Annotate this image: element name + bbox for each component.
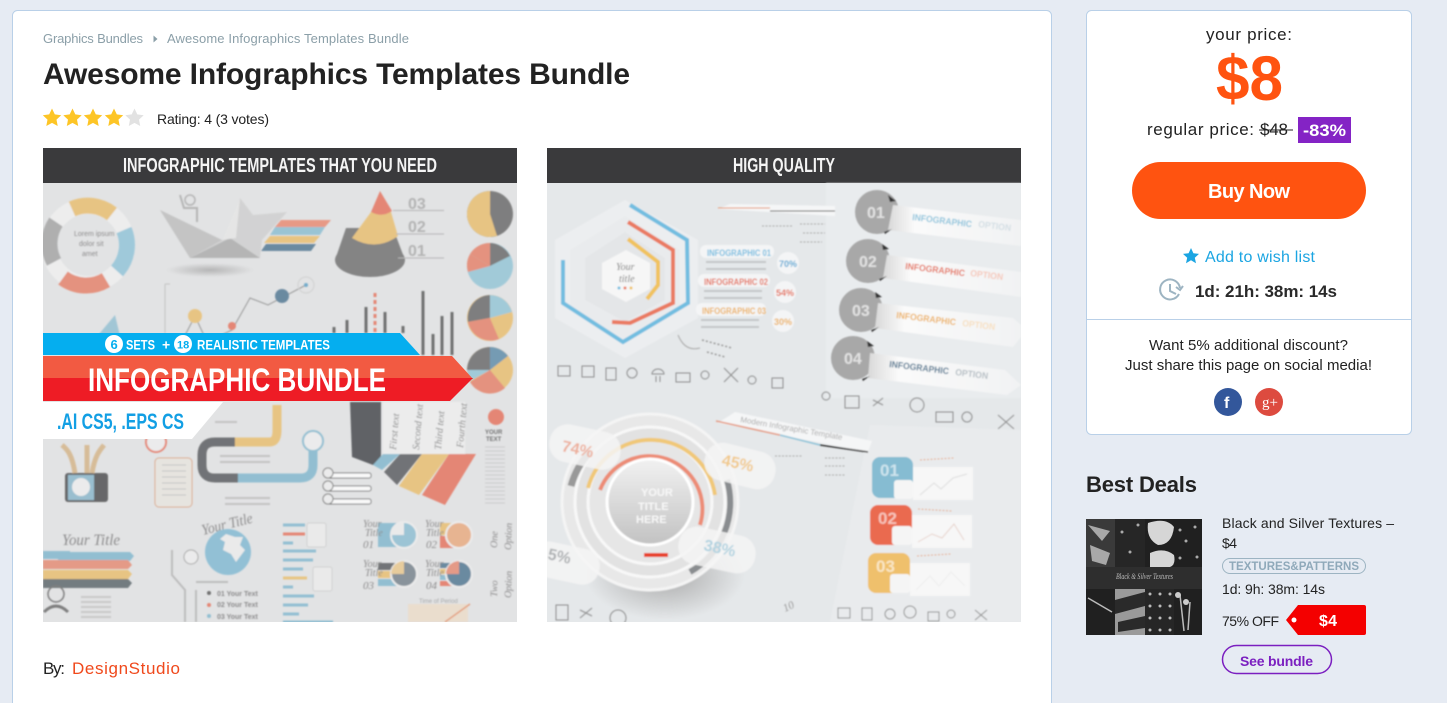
artwork: hexagon chart: INFOGRAPHIC 01 — [707, 248, 771, 258]
price value: $8 — [1216, 44, 1283, 114]
image header — [43, 148, 517, 183]
artwork: numbered ribbons: INFOGRAPHIC — [889, 359, 950, 376]
artwork: lower templates: Your Title — [62, 532, 120, 549]
artwork: lower templates: 03 — [363, 580, 374, 592]
regular price: $48 — [1260, 120, 1288, 139]
image header — [547, 148, 1021, 183]
artwork: lower templates: Option — [503, 571, 515, 598]
artwork: hexagon chart: 54% — [776, 288, 794, 298]
artwork: upper templates: dolor sit — [79, 241, 104, 248]
artwork: round chart and step cards: 74% — [560, 438, 595, 462]
artwork: round chart and step cards: 02 — [878, 509, 897, 528]
artwork: round chart and step cards: 45% — [720, 452, 755, 476]
deal thumbnail: Black & Silver Textures — [1116, 571, 1173, 581]
artwork: lower templates: Title — [365, 528, 383, 539]
artwork: lower templates — [43, 402, 515, 622]
artwork: lower templates: Second text — [411, 403, 426, 450]
artwork: lower templates: 02 Your Text — [217, 602, 259, 609]
artwork: numbered ribbons: INFOGRAPHIC — [905, 261, 966, 278]
artwork: round chart and step cards: 03 — [876, 557, 895, 576]
discount text: 75% OFF — [1222, 613, 1279, 629]
artwork: numbered ribbons: OPTION — [978, 219, 1012, 233]
artwork: numbered ribbons: 01 — [867, 205, 885, 222]
blue banner: 6 — [110, 337, 118, 352]
artwork: lower templates: One — [489, 531, 501, 548]
icon: google plus — [1255, 388, 1283, 416]
title: Awesome Infographics Templates Bundle — [43, 58, 630, 91]
artwork: lower templates: Option — [503, 523, 515, 550]
artwork: lower templates: Title — [365, 568, 383, 579]
artwork: hexagon chart: INFOGRAPHIC 02 — [704, 277, 768, 287]
artwork: upper templates: amet — [82, 251, 98, 258]
artwork: numbered ribbons: 03 — [852, 303, 870, 320]
artwork: lower templates: Your — [363, 519, 382, 530]
panel: main product — [12, 10, 1052, 703]
share prompt: Just share this page on social media! — [1125, 357, 1372, 374]
artwork: lower templates: 01 — [363, 539, 374, 551]
deal countdown: 1d: 9h: 38m: 14s — [1222, 581, 1325, 597]
artwork: upper templates: 02 — [408, 219, 426, 236]
deal title: $4 — [1222, 535, 1237, 551]
artwork: round chart and step cards: HERE — [636, 514, 667, 526]
artwork: round chart and step cards: 5% — [546, 546, 572, 568]
artwork: round chart and step cards: 38% — [702, 537, 737, 561]
artwork: lower templates: 01 Your Text — [217, 591, 259, 598]
artwork: round chart and step cards — [527, 392, 1021, 626]
artwork: lower templates: TEXT — [486, 437, 502, 443]
artwork: numbered ribbons: INFOGRAPHIC — [896, 310, 957, 327]
your price label: your price: — [1206, 25, 1292, 44]
artwork: lower templates: YOUR — [485, 430, 503, 436]
icon: google plus: g+ — [1262, 395, 1278, 411]
buy now button — [1132, 162, 1366, 219]
artwork: upper templates — [49, 191, 513, 394]
share prompt: Want 5% additional discount? — [1149, 337, 1348, 354]
discount badge: -83% — [1303, 121, 1346, 140]
artwork: round chart and step cards: 01 — [880, 461, 899, 480]
artwork: lower templates: Your Title — [200, 511, 255, 539]
artwork: lower templates: Your — [363, 559, 382, 570]
artwork: lower templates: Title — [426, 568, 444, 579]
blue banner — [43, 333, 420, 355]
author line: By: — [43, 659, 65, 678]
artwork: numbered ribbons: OPTION — [962, 318, 996, 332]
countdown: 1d: 21h: 38m: 14s — [1195, 282, 1337, 301]
see bundle button: See bundle — [1240, 653, 1313, 669]
rating stars — [43, 108, 144, 126]
artwork: numbered ribbons: 04 — [844, 351, 862, 368]
price tag — [1286, 605, 1366, 635]
rating text: Rating: 4 (3 votes) — [157, 111, 269, 127]
icon: facebook — [1214, 388, 1242, 416]
red banner — [43, 356, 473, 401]
breadcrumb — [43, 31, 409, 46]
artwork: upper templates: 01 — [408, 243, 426, 260]
artwork: hexagon chart: title — [619, 274, 635, 285]
artwork: numbered ribbons: OPTION — [955, 367, 989, 381]
category pill: TEXTURES&PATTERNS — [1229, 559, 1359, 573]
see bundle button — [1222, 646, 1332, 674]
artwork: lower templates: Your — [425, 559, 444, 570]
artwork: lower templates: Time of Period — [419, 599, 458, 605]
artwork: numbered ribbons — [831, 190, 1021, 395]
breadcrumb: Graphics Bundles — [43, 31, 144, 46]
regular price: regular price: — [1147, 120, 1254, 139]
artwork: round chart and step cards: TITLE — [638, 501, 669, 513]
blue banner: 18 — [177, 340, 189, 352]
blue banner: + — [162, 336, 170, 352]
buy now button: Buy Now — [1208, 181, 1290, 203]
image: infographic bundle preview — [43, 148, 517, 622]
white banner — [43, 402, 223, 439]
artwork: hexagon chart: 30% — [774, 317, 792, 327]
share prompt — [1125, 337, 1372, 374]
image: high quality preview — [527, 148, 1021, 626]
artwork: lower templates: 02 — [426, 539, 438, 551]
artwork: lower templates: 04 — [426, 580, 438, 592]
panel: price card — [1086, 10, 1412, 434]
icon: facebook: f — [1224, 395, 1230, 412]
image header: HIGH QUALITY — [733, 155, 835, 177]
artwork: lower templates: Title — [426, 528, 444, 539]
blue banner: REALISTIC TEMPLATES — [197, 336, 330, 352]
deal thumbnail — [1086, 519, 1202, 635]
deal title: Black and Silver Textures – — [1222, 515, 1394, 531]
artwork: lower templates: Your — [425, 519, 444, 530]
artwork: lower templates: 03 Your Text — [217, 614, 259, 621]
artwork: numbered ribbons: 02 — [859, 254, 877, 271]
wish list link: Add to wish list — [1205, 249, 1316, 266]
artwork: round chart and step cards: YOUR — [641, 487, 673, 499]
artwork: hexagon chart: 70% — [779, 259, 797, 269]
artwork: hexagon chart — [555, 183, 1021, 398]
artwork: hexagon chart: INFOGRAPHIC 03 — [702, 306, 766, 316]
discount badge — [1298, 117, 1351, 143]
author line: DesignStudio — [72, 659, 180, 678]
artwork: numbered ribbons: OPTION — [970, 268, 1004, 282]
artwork: upper templates: Lorem ipsum — [74, 231, 115, 238]
artwork: lower templates: Fourth text — [455, 403, 470, 449]
artwork: lower templates: First text — [388, 413, 402, 451]
artwork: lower templates: Two — [489, 580, 501, 597]
image header: INFOGRAPHIC TEMPLATES THAT YOU NEED — [123, 155, 437, 177]
heading: best deals: Best Deals — [1086, 472, 1197, 497]
artwork: hexagon chart: Your — [616, 262, 635, 273]
blue banner: SETS — [126, 336, 155, 352]
artwork: round chart and step cards: Modern Infographic Template — [740, 415, 844, 442]
artwork: lower templates: Third text — [433, 410, 447, 450]
deal title — [1222, 515, 1394, 551]
artwork: round chart and step cards: 10 — [781, 599, 797, 615]
price tag: $4 — [1319, 613, 1337, 630]
artwork: upper templates: 03 — [408, 196, 426, 213]
artwork: numbered ribbons: INFOGRAPHIC — [912, 212, 973, 229]
white banner: .AI CS5, .EPS CS — [57, 409, 184, 434]
red banner: INFOGRAPHIC BUNDLE — [88, 362, 386, 398]
deal card: black and silver textures — [1086, 515, 1394, 674]
breadcrumb: Awesome Infographics Templates Bundle — [167, 31, 409, 46]
